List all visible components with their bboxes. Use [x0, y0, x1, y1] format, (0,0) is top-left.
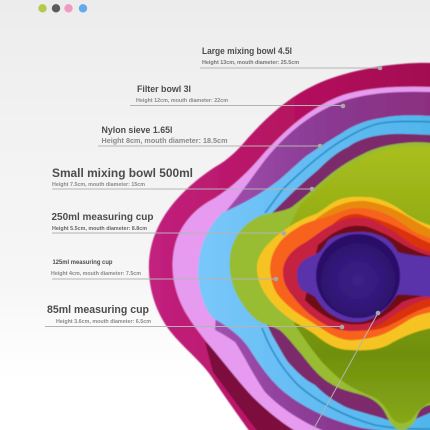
label: 125ml measuring cup: Height 4cm, mouth diameter: 7.5cm [51, 271, 142, 277]
label: filter bowl: Height 12cm, mouth diameter: 22cm [136, 98, 229, 104]
small mixing bowl [230, 142, 430, 430]
label: small mixing bowl: Height 7.5cm, mouth diameter: 15cm [52, 182, 146, 188]
nylon sieve [198, 115, 430, 430]
label: nylon sieve: Height 8cm, mouth diameter: 18.5cm [102, 138, 228, 145]
leader line: 125ml cup [52, 277, 278, 281]
colour option dots [38, 4, 87, 12]
85ml measuring cup [283, 218, 430, 331]
250ml measuring cup [257, 197, 430, 350]
label: 250ml measuring cup: Height 5.5cm, mouth diameter: 8.8cm [52, 226, 148, 232]
leader line: filter bowl [130, 104, 345, 108]
label: small mixing bowl: Small mixing bowl 500ml [52, 166, 193, 180]
leader line: 250ml cup [52, 231, 286, 236]
leader line: diagonal to purple cup [313, 311, 380, 430]
leader line: large mixing bowl [200, 66, 382, 70]
label: nylon sieve [102, 125, 228, 145]
label: large mixing bowl: Large mixing bowl 4.5l [202, 46, 292, 56]
125ml measuring cup [270, 208, 430, 340]
label: 250ml measuring cup: 250ml measuring cup [52, 212, 154, 223]
label: large mixing bowl [202, 46, 300, 66]
nested bowl set [149, 63, 430, 430]
large mixing bowl [149, 63, 430, 430]
leader line: nylon sieve [98, 144, 322, 148]
label: 85ml measuring cup: 85ml measuring cup [47, 304, 149, 316]
label: filter bowl: Filter bowl 3l [137, 84, 191, 94]
leader line: small mixing bowl [52, 187, 314, 191]
purple measuring cup [297, 232, 430, 322]
label: small mixing bowl [52, 166, 193, 188]
label: 85ml measuring cup: Height 3.6cm, mouth diameter: 6.5cm [56, 319, 152, 325]
filter bowl [173, 87, 430, 430]
label: 85ml measuring cup [47, 304, 152, 325]
label: 125ml measuring cup: 125ml measuring cup [52, 259, 113, 266]
label: 125ml measuring cup [51, 259, 142, 277]
label: filter bowl [136, 84, 229, 104]
leader line: 85ml cup [45, 325, 344, 329]
label: 250ml measuring cup [52, 212, 154, 232]
label: large mixing bowl: Height 13cm, mouth diameter: 25.5cm [202, 60, 300, 66]
label: nylon sieve: Nylon sieve 1.65l [102, 125, 172, 136]
